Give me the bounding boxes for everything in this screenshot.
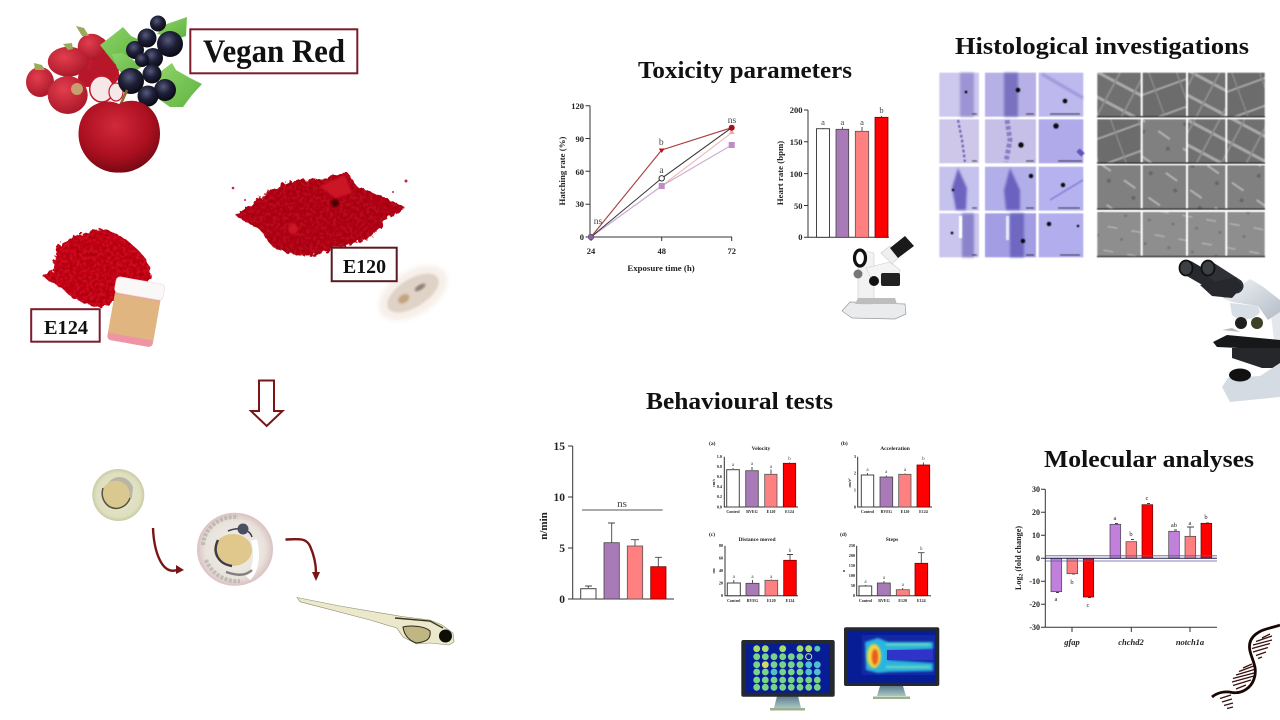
chart: distance moved: E124 xyxy=(786,598,794,603)
arrow: hollow down arrow xyxy=(251,380,282,426)
chart: distance moved: cm xyxy=(711,568,716,574)
icon: zebrafish embryo early xyxy=(92,469,144,521)
chart: acceleration: RVEG xyxy=(881,509,892,514)
chart: hatching rate line chart: 30 xyxy=(576,199,584,209)
label: E124 xyxy=(31,309,100,342)
chart: steps: Steps xyxy=(886,537,898,543)
chart: steps: RVEG xyxy=(878,598,890,603)
chart: gene expression bars: -30 xyxy=(1029,623,1040,632)
chart: steps: b xyxy=(920,547,923,552)
chart: acceleration: Control xyxy=(861,509,875,514)
chart: gene expression bars: c xyxy=(1087,602,1090,609)
chart: gene expression bars: c xyxy=(1146,495,1149,502)
chart: gene expression bars: b xyxy=(1129,531,1133,538)
chart: gene expression bars: 20 xyxy=(1032,508,1040,517)
chart: gene expression bars: b xyxy=(1070,579,1074,586)
icon: powder jar xyxy=(106,276,165,348)
chart: heart rate bars xyxy=(775,105,889,242)
icon: monitor with heat map xyxy=(844,627,939,699)
icon: monitor with well plate xyxy=(741,640,835,710)
icon: light microscope xyxy=(1180,260,1280,402)
chart: gene expression bars: chchd2 xyxy=(1118,637,1144,647)
chart: velocity: a xyxy=(770,465,773,470)
chart: steps: n xyxy=(843,568,846,573)
chart: acceleration: a xyxy=(904,468,907,473)
chart: distance moved: 20 xyxy=(719,580,723,586)
chart: heart rate bars: 200 xyxy=(790,105,802,115)
chart: distance moved: 80 xyxy=(719,543,723,548)
chart: distance moved: 0 xyxy=(721,593,723,598)
chart: heart rate bars: a xyxy=(841,117,845,127)
chart: acceleration: 2 xyxy=(854,470,856,476)
chart: distance moved: RVEG xyxy=(747,598,758,603)
chart: hatching rate line chart: 120 xyxy=(571,101,584,111)
chart: n/min bars: n/min xyxy=(538,512,550,540)
chart: gene expression bars: -20 xyxy=(1029,600,1040,609)
chart: gene expression bars: a xyxy=(1114,515,1117,522)
chart: velocity: 0.6 xyxy=(717,474,722,479)
chart: hatching rate line chart: 48 xyxy=(657,246,666,256)
chart: hatching rate line chart: Exposure time (h) xyxy=(627,263,695,273)
chart: velocity: (a) xyxy=(709,440,716,447)
chart: hatching rate line chart: 72 xyxy=(727,246,736,256)
label: E120: E120 xyxy=(343,256,386,278)
chart: velocity: Velocity xyxy=(752,446,771,452)
chart: velocity: b xyxy=(788,457,791,462)
icon: zebrafish embryo late xyxy=(198,513,272,585)
label: Vegan Red: Vegan Red xyxy=(203,34,345,70)
label: E120 xyxy=(332,248,397,281)
chart: n/min bars: 5 xyxy=(559,543,565,555)
chart: hatching rate line chart xyxy=(557,101,737,273)
chart: gene expression bars xyxy=(1014,485,1217,647)
label: E124: E124 xyxy=(44,317,88,339)
chart: n/min bars: 0 xyxy=(559,594,565,606)
chart: velocity xyxy=(709,440,798,514)
chart: distance moved: 60 xyxy=(719,556,723,560)
arrow: curved arrow to hatching embryo xyxy=(153,528,184,574)
heading: Molecular analyses: Molecular analyses xyxy=(1044,447,1254,473)
icon: cochineal insect xyxy=(369,254,457,332)
heading: Behavioural tests: Behavioural tests xyxy=(646,389,833,415)
chart: heart rate bars: 0 xyxy=(798,232,802,242)
chart: steps xyxy=(840,531,931,603)
chart: gene expression bars: Log xyxy=(1014,576,1023,590)
chart: distance moved: (c) xyxy=(709,531,715,538)
icon: E124 powder xyxy=(42,229,151,307)
chart: n/min bars xyxy=(538,441,674,606)
chart: distance moved: b xyxy=(789,549,792,554)
chart: acceleration: b xyxy=(922,457,925,462)
chart: steps: (d) xyxy=(840,531,847,538)
chart: distance moved: Control xyxy=(727,598,741,603)
chart: hatching rate line chart: 90 xyxy=(576,134,584,144)
chart: gene expression bars: b xyxy=(1204,514,1208,521)
chart: steps: a xyxy=(864,580,867,585)
icon: stereo microscope xyxy=(842,236,914,319)
image: light microscopy panels xyxy=(939,73,1083,257)
chart: hatching rate line chart: ns xyxy=(728,116,737,126)
chart: n/min bars: 15 xyxy=(554,441,565,453)
chart: hatching rate line chart: ns xyxy=(594,217,603,227)
chart: heart rate bars: 150 xyxy=(790,137,802,147)
icon: E120 powder xyxy=(232,173,408,256)
chart: gene expression bars: ab xyxy=(1171,522,1177,529)
image: electron microscopy panels xyxy=(1097,73,1265,257)
chart: steps: E120 xyxy=(898,598,907,603)
chart: distance moved: E120 xyxy=(767,598,776,603)
icon: zebrafish larva xyxy=(297,598,454,645)
chart: gene expression bars: 30 xyxy=(1032,485,1040,494)
chart: velocity: 0.0 xyxy=(717,504,722,510)
chart: n/min bars: ns xyxy=(617,498,627,510)
chart: acceleration: 3 xyxy=(854,454,856,459)
chart: velocity: 0.8 xyxy=(717,464,722,469)
chart: steps: 100 xyxy=(849,573,855,578)
chart: velocity: cm/s xyxy=(711,479,716,487)
heading: Toxicity parameters: Toxicity parameters xyxy=(638,58,852,84)
chart: acceleration: (b) xyxy=(841,440,848,447)
chart: n/min bars: 10 xyxy=(554,492,565,504)
heading: Histological investigations: Histological investigations xyxy=(955,34,1249,60)
chart: acceleration: 0 xyxy=(854,504,856,510)
chart: distance moved xyxy=(709,531,798,603)
arrow: curved arrow to larva xyxy=(286,539,320,581)
chart: heart rate bars: 100 xyxy=(790,169,802,179)
icon: red fruit group xyxy=(26,16,202,173)
chart: acceleration: a xyxy=(866,468,869,473)
chart: steps: Control xyxy=(859,598,873,603)
chart: heart rate bars: Heart rate (bpm) xyxy=(775,141,785,205)
chart: hatching rate line chart: 60 xyxy=(576,167,584,177)
chart: steps: a xyxy=(883,576,886,581)
chart: gene expression bars: a xyxy=(1189,520,1192,527)
chart: distance moved: a xyxy=(751,575,754,580)
chart: gene expression bars: a xyxy=(1055,596,1058,603)
chart: hatching rate line chart: 0 xyxy=(580,232,584,242)
chart: gene expression bars: 0 xyxy=(1036,554,1040,563)
icon: DNA helix xyxy=(1212,625,1280,708)
chart: velocity: a xyxy=(732,463,735,468)
chart: gene expression bars: 10 xyxy=(1032,531,1040,540)
chart: steps: E124 xyxy=(917,598,926,603)
chart: heart rate bars: a xyxy=(821,117,825,127)
chart: steps: 150 xyxy=(849,563,855,568)
chart: velocity: 1.0 xyxy=(717,454,722,459)
chart: steps: 0 xyxy=(853,593,855,598)
chart: velocity: RVEG xyxy=(746,509,758,514)
chart: velocity: Control xyxy=(726,509,741,514)
chart: distance moved: Distance moved xyxy=(738,537,776,543)
chart: hatching rate line chart: Hatching rate (%) xyxy=(557,136,567,205)
chart: gene expression bars: 2 xyxy=(1018,573,1024,576)
chart: gene expression bars: gfap xyxy=(1063,637,1080,647)
chart: hatching rate line chart: 24 xyxy=(587,246,596,256)
chart: gene expression bars: -10 xyxy=(1029,577,1040,586)
chart: velocity: E120 xyxy=(767,509,775,514)
chart: distance moved: a xyxy=(770,575,773,580)
chart: hatching rate line chart: b xyxy=(659,138,664,148)
chart: acceleration: E124 xyxy=(919,509,928,514)
chart: steps: 50 xyxy=(851,583,855,588)
chart: acceleration xyxy=(841,440,932,514)
chart: heart rate bars: a xyxy=(860,117,864,127)
chart: velocity: a xyxy=(751,462,754,467)
chart: gene expression bars: (fold change) xyxy=(1014,526,1023,574)
chart: hatching rate line chart: a xyxy=(659,166,664,176)
chart: acceleration: a xyxy=(885,470,888,475)
chart: steps: 250 xyxy=(849,543,855,548)
chart: acceleration: E120 xyxy=(901,509,909,514)
chart: acceleration: cm/s² xyxy=(847,478,852,487)
chart: distance moved: 40 xyxy=(719,568,723,573)
chart: velocity: E124 xyxy=(785,509,794,514)
chart: steps: a xyxy=(902,583,905,588)
chart: distance moved: a xyxy=(733,575,736,580)
chart: heart rate bars: 50 xyxy=(794,201,802,211)
chart: acceleration: 1 xyxy=(854,488,856,492)
chart: velocity: 0.2 xyxy=(717,494,722,499)
chart: velocity: 0.4 xyxy=(717,484,723,489)
chart: gene expression bars: notch1a xyxy=(1176,637,1205,647)
chart: acceleration: Acceleration xyxy=(880,446,910,452)
chart: steps: 200 xyxy=(849,553,855,558)
chart: heart rate bars: b xyxy=(879,105,884,115)
